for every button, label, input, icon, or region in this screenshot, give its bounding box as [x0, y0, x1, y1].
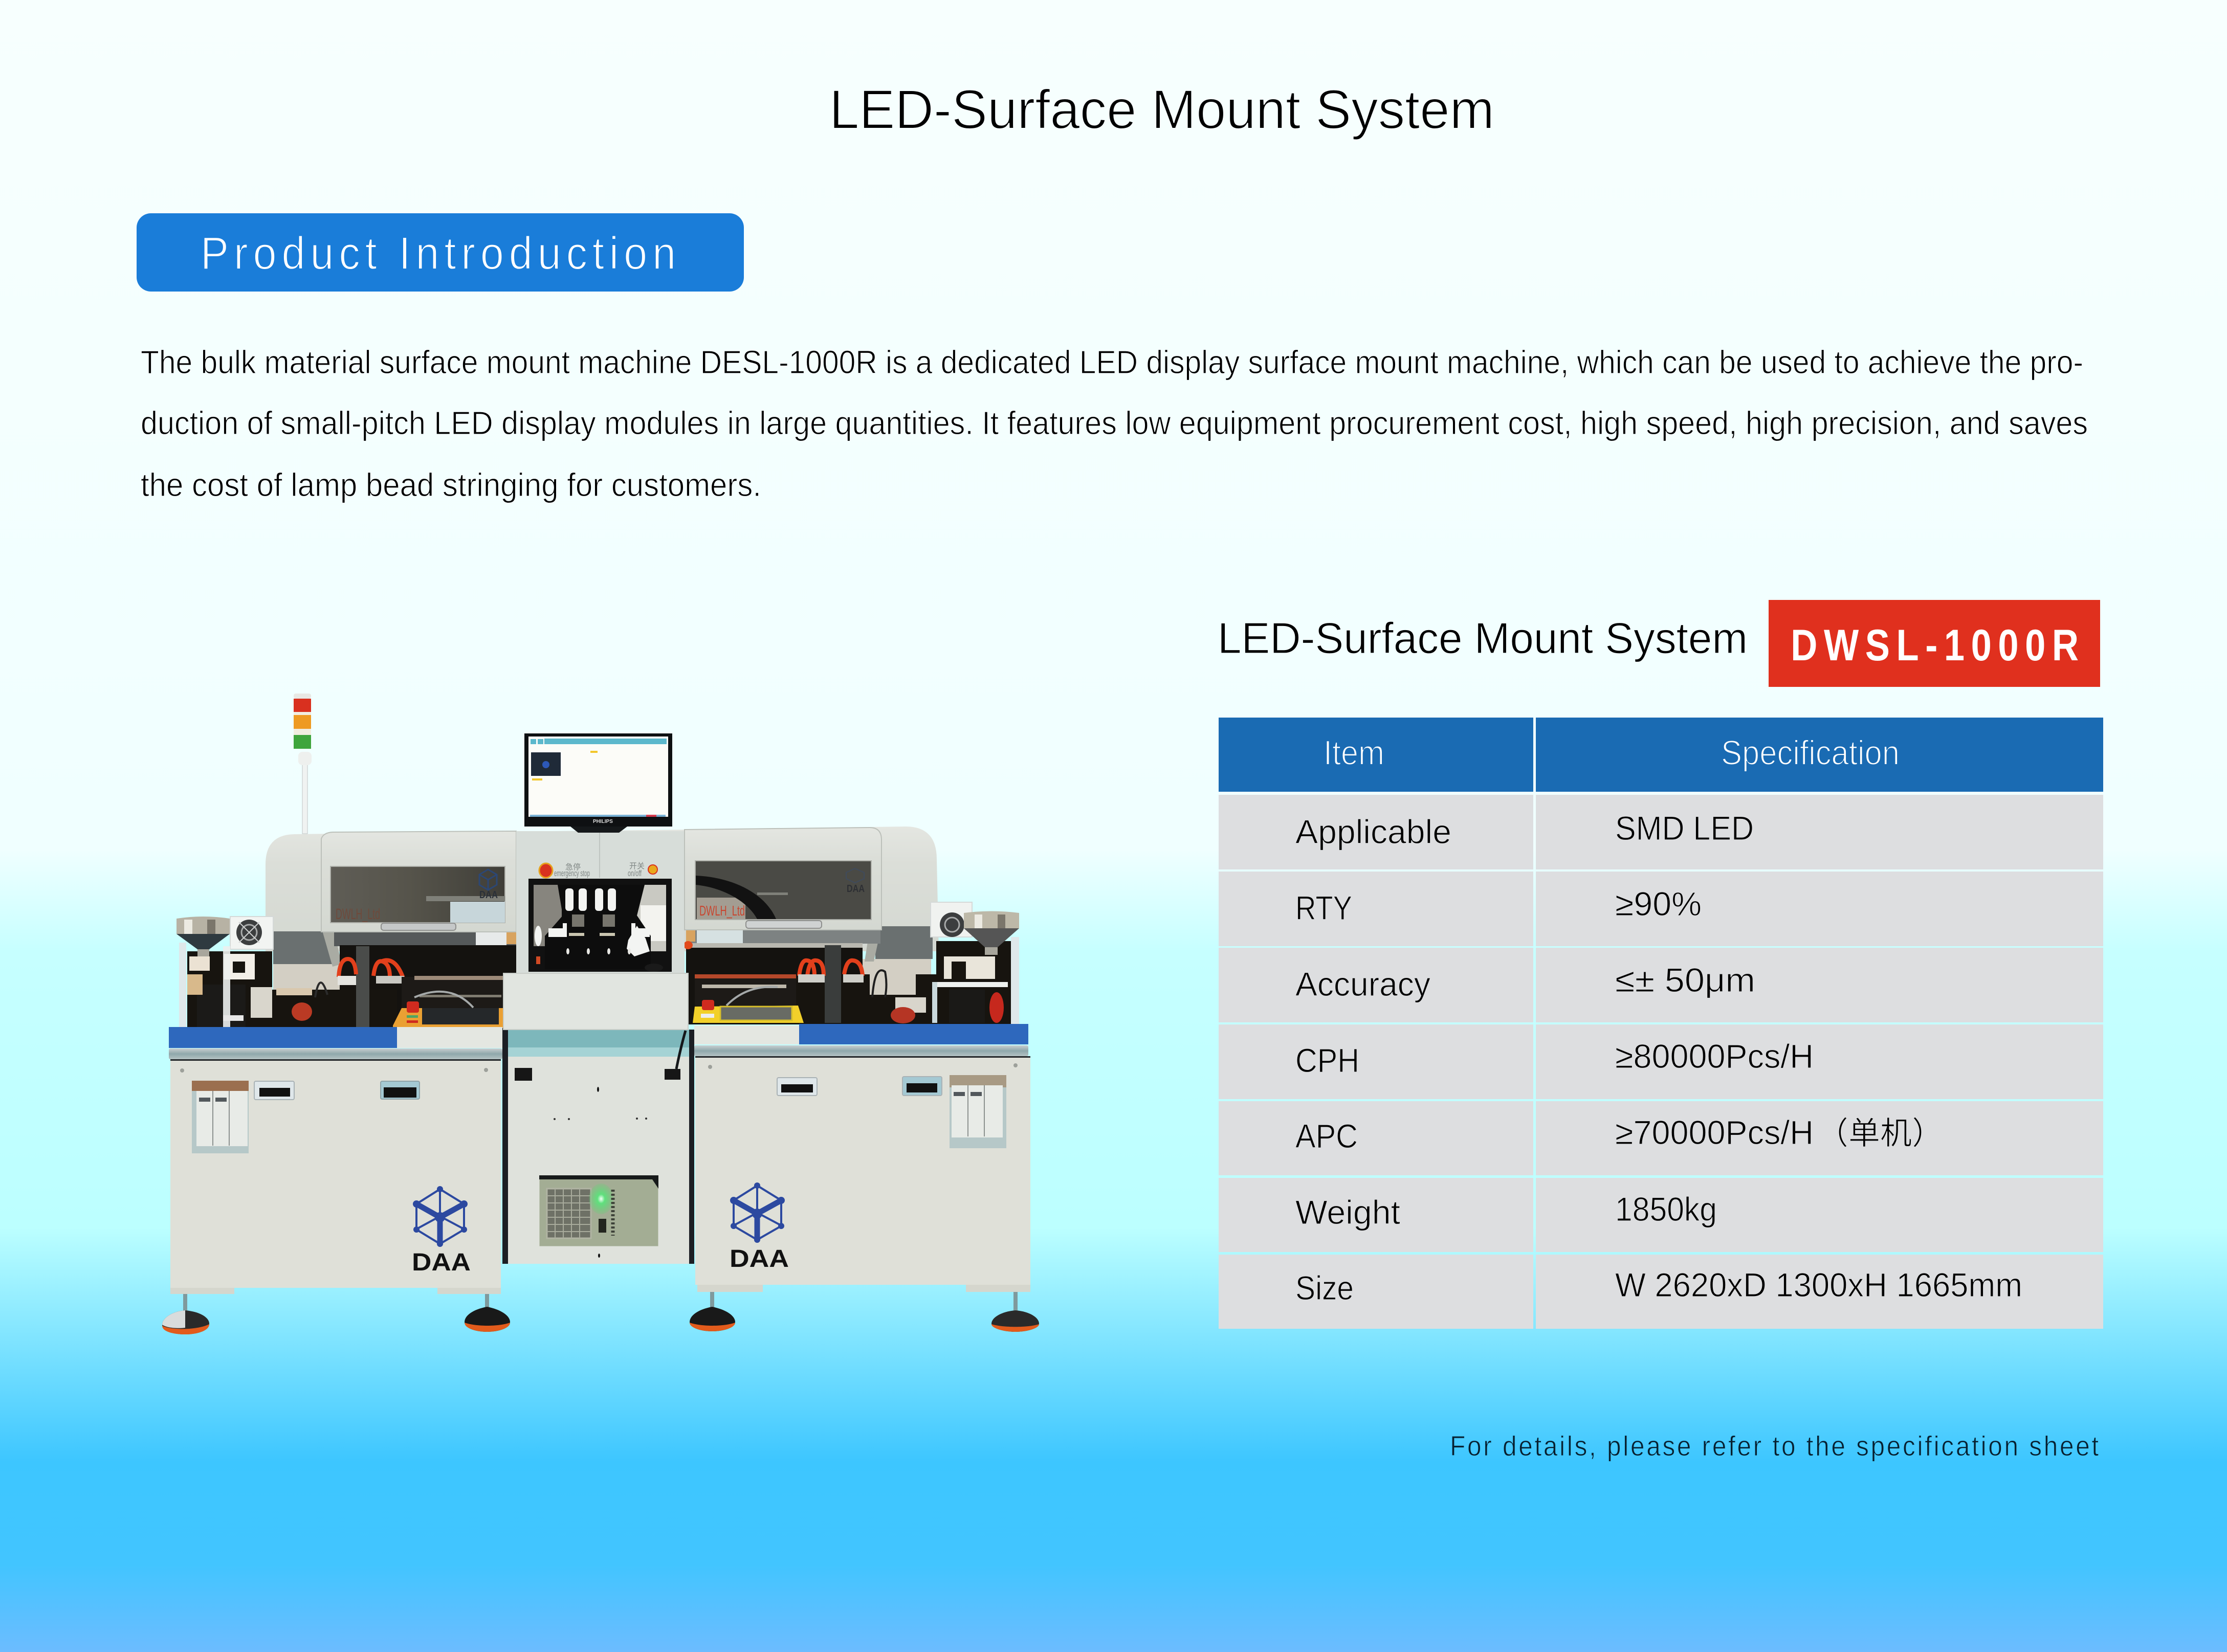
center cover with stop and on/off controls: 急停	[565, 863, 581, 872]
row: Applicable	[1219, 795, 2103, 869]
row: Size: W 2620xD 1300xH 1665mm	[1615, 1266, 2022, 1304]
signal tower	[294, 694, 312, 834]
breaker panel	[192, 1081, 249, 1153]
right feeder module with hopper and fan	[695, 902, 1019, 1024]
table header	[1219, 718, 2103, 792]
intro paragraph: the cost of lamp bead stringing for customers.	[141, 466, 761, 503]
DAA logo left	[413, 1186, 468, 1247]
center window with placement heads	[528, 879, 672, 972]
row: Weight: Weight	[1295, 1193, 1400, 1231]
spec heading: LED-Surface Mount System	[1218, 614, 1748, 663]
center cover with stop and on/off controls	[516, 831, 685, 974]
model badge: DWSL-1000R: DWSL-1000R	[1791, 620, 2079, 669]
left cabinet: DAA	[412, 1249, 471, 1276]
model badge: DWSL-1000R	[1769, 600, 2100, 687]
left door with window: DWLH_Ltd	[336, 906, 380, 923]
row: Size: Size	[1295, 1269, 1354, 1307]
right door with window	[685, 828, 881, 930]
left table top	[169, 1001, 503, 1059]
cabinet handles	[777, 1078, 817, 1096]
left feeder module with hopper and fan	[177, 917, 503, 1028]
row: Weight: 1850kg	[1615, 1190, 1717, 1228]
center column	[502, 973, 694, 1264]
monitor: PHILIPS	[593, 819, 613, 824]
right cabinet	[695, 1056, 1030, 1292]
top cover housing	[266, 827, 939, 1030]
DAA logo right	[730, 1182, 785, 1243]
table header: Item	[1324, 733, 1384, 772]
row: APC: APC	[1295, 1117, 1358, 1155]
row: Accuracy: ≤± 50μm	[1615, 961, 1755, 999]
right door with window: DWLH_Ltd	[699, 903, 745, 919]
row: Weight	[1219, 1178, 2103, 1252]
row: CPH: CPH	[1295, 1041, 1359, 1079]
right cabinet: DAA	[730, 1245, 789, 1273]
footnote: For details, please refer to the specification sheet	[1450, 1431, 2099, 1462]
row: APC	[1219, 1101, 2103, 1175]
table header: Specification	[1721, 733, 1900, 772]
row: Accuracy	[1219, 948, 2103, 1022]
console block	[503, 973, 688, 1030]
left door with window	[321, 831, 516, 932]
row: Size	[1219, 1255, 2103, 1329]
specification table	[1219, 718, 2103, 1329]
center cover with stop and on/off controls: 开关	[629, 862, 645, 870]
left cabinet	[170, 1059, 501, 1294]
row: RTY: ≥90%	[1615, 885, 1702, 923]
breaker panel	[950, 1075, 1006, 1148]
product photo illustration: LED surface mount machine	[162, 694, 1039, 1334]
section badge: Product Introduction: Product Introduction	[201, 228, 676, 279]
section badge: Product Introduction	[137, 213, 744, 292]
intro paragraph: duction of small-pitch LED display modules in large quantities. It features low equipment procurement cost, high speed, high precision, and saves	[141, 405, 2088, 441]
row: CPH: ≥80000Pcs/H	[1615, 1037, 1814, 1075]
center cover with stop and on/off controls: emergency stop	[554, 868, 590, 878]
dark sections under covers	[273, 931, 334, 964]
row: CPH	[1219, 1024, 2103, 1099]
cabinet handles	[254, 1081, 294, 1100]
row: Accuracy: Accuracy	[1295, 965, 1430, 1003]
row: APC: （单机）	[1817, 1116, 1944, 1151]
leveling feet	[162, 1292, 1039, 1334]
left door with window: DAA	[479, 889, 498, 901]
center cover with stop and on/off controls: on/off	[628, 868, 642, 878]
row: APC: ≥70000Pcs/H	[1615, 1113, 1814, 1151]
row: Applicable: Applicable	[1295, 813, 1451, 851]
intro paragraph	[141, 344, 2088, 503]
right door with window: DAA	[847, 883, 865, 895]
industrial PC	[539, 1175, 658, 1246]
intro paragraph: The bulk material surface mount machine DESL-1000R is a dedicated LED display surface mount machine, which can be used to achieve the pro-	[141, 344, 2083, 381]
title: LED-Surface Mount System	[829, 78, 1494, 140]
right table top	[693, 1000, 1028, 1056]
monitor	[524, 733, 672, 833]
row: RTY: RTY	[1295, 889, 1352, 927]
row: RTY	[1219, 872, 2103, 946]
row: Applicable: SMD LED	[1615, 809, 1754, 847]
